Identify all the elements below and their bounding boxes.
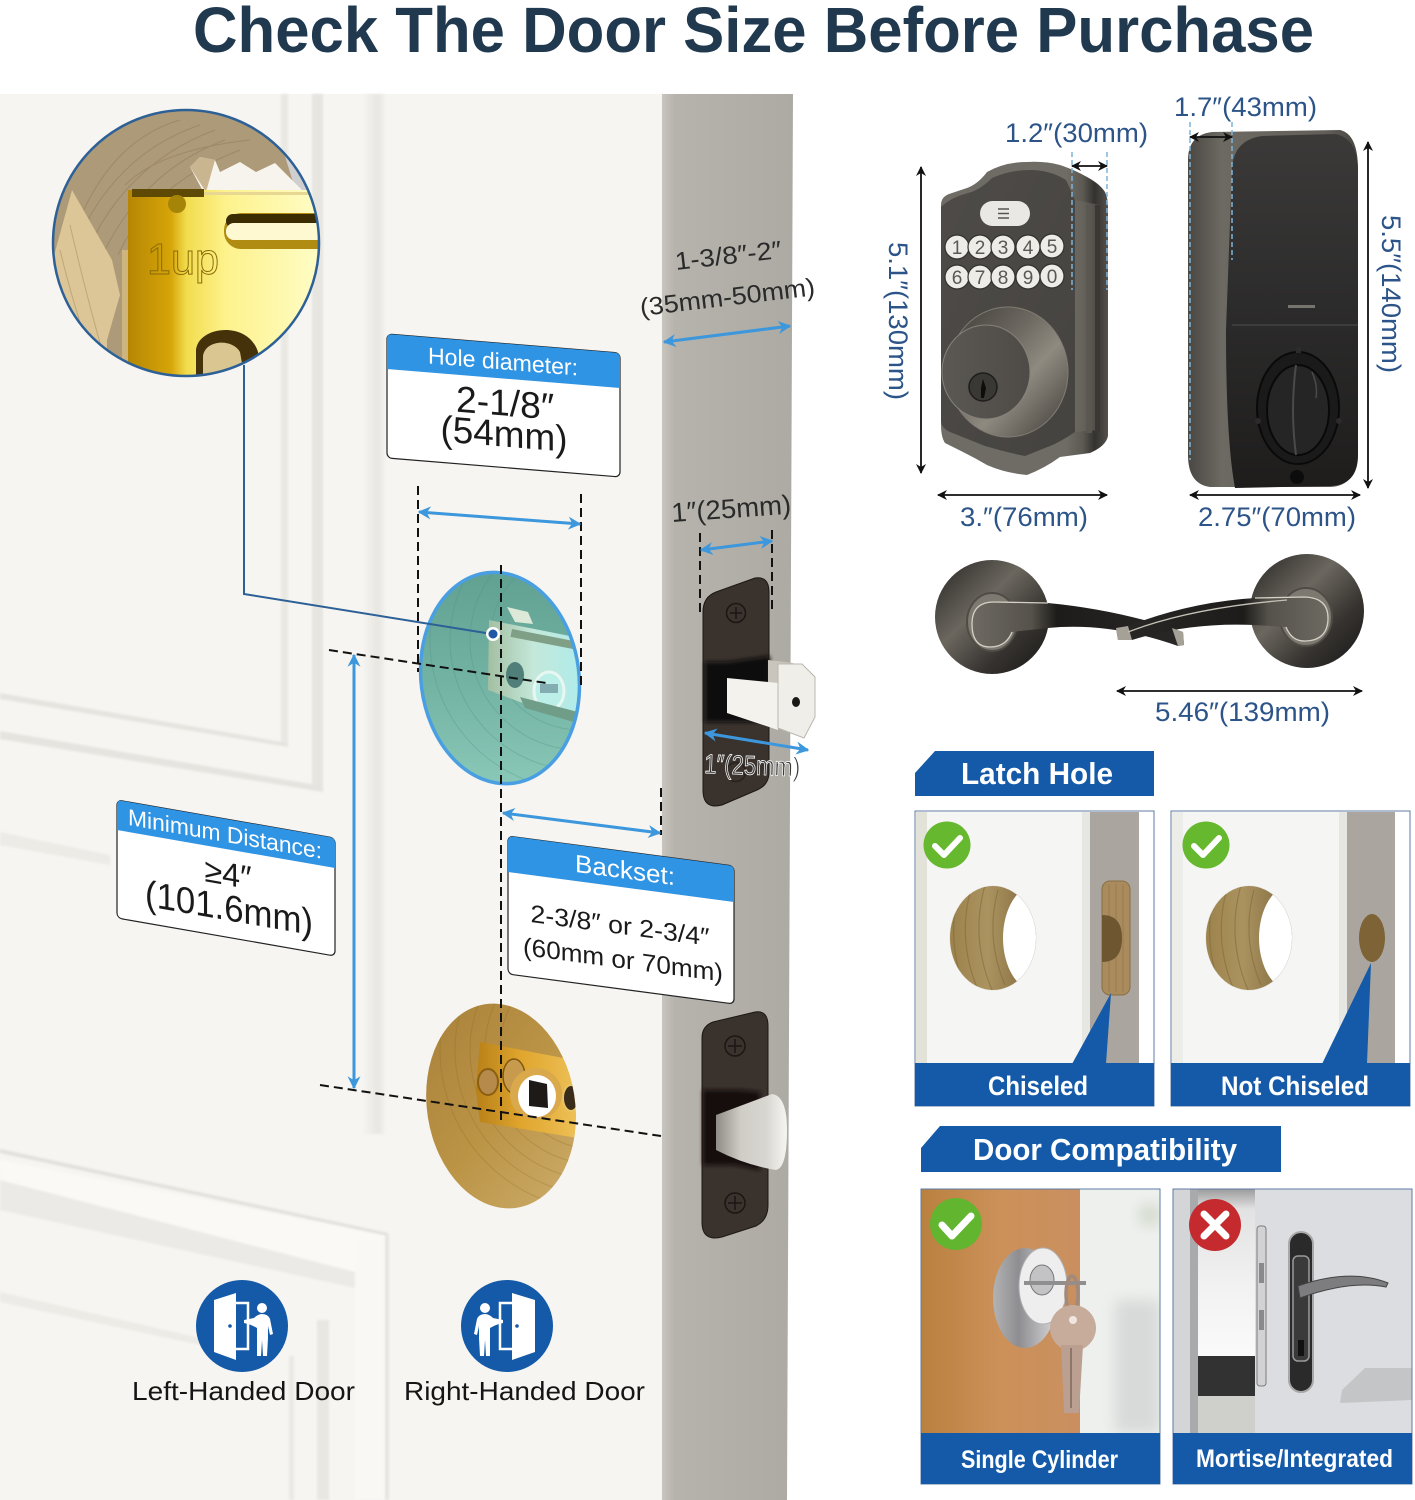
lock dimension labels: 3.″(76mm) — [960, 502, 1088, 532]
leader line to magnifier — [244, 365, 500, 641]
menu button — [980, 201, 1030, 226]
label: door thickness — [638, 236, 816, 322]
panel: mortise integrated: Mortise/Integrated — [1196, 1445, 1393, 1473]
keypad: 5 — [1047, 237, 1057, 258]
callout: backset: Backset: — [575, 850, 675, 891]
door illustration — [0, 94, 793, 1500]
keypad deadbolt, front view — [941, 162, 1108, 475]
panel: single cylinder: Single Cylinder — [961, 1446, 1118, 1474]
keypad: 7 — [975, 268, 985, 289]
callout: hole diameter: Hole diameter: — [428, 342, 578, 381]
callout: minimum distance: ≥4″ — [204, 852, 252, 897]
section heading: door compatibility: Door Compatibility — [973, 1132, 1238, 1167]
strike plate with beveled latch — [702, 1012, 787, 1238]
lock dimension labels: 1.7″(43mm) — [1174, 92, 1317, 122]
strike plate with square deadbolt — [703, 578, 815, 806]
keypad: 2 — [975, 238, 985, 259]
section heading: door compatibility — [921, 1126, 1281, 1172]
screw — [726, 604, 746, 622]
label: bolt width: 1″(25mm) — [704, 749, 801, 782]
icon: check — [930, 1198, 982, 1250]
keypad: 6 — [952, 268, 962, 289]
lever handles — [935, 554, 1364, 674]
panel: chiseled: Chiseled — [988, 1071, 1088, 1101]
section heading: latch hole: Latch Hole — [961, 756, 1113, 791]
magnifier: latch plate close-up — [50, 105, 334, 380]
icon: left-handed door — [196, 1280, 288, 1372]
callout: minimum distance — [117, 800, 335, 956]
lock dimension labels: 5.1″(130mm) — [883, 242, 913, 400]
panel: single cylinder — [921, 1189, 1162, 1484]
smart lock, back view — [1188, 130, 1358, 488]
panel: not chiseled: Not Chiseled — [1221, 1071, 1369, 1101]
callout: hole diameter: (54mm) — [440, 407, 567, 460]
callout: minimum distance: Minimum Distance: — [128, 804, 322, 864]
bore hole — [1206, 886, 1292, 990]
keypad: 8 — [998, 268, 1008, 289]
panel: mortise integrated — [1173, 1189, 1412, 1484]
lock dimension labels: 2.75″(70mm) — [1198, 502, 1356, 532]
keyed cylinder — [942, 307, 1068, 437]
chiseled latch recess — [1102, 881, 1130, 995]
section heading: latch hole — [915, 751, 1154, 796]
callout: backset: 2-3/8″ or 2-3/4″ — [530, 900, 710, 952]
callout: hole diameter — [387, 334, 620, 477]
bore hole — [950, 886, 1036, 990]
icon: check — [924, 822, 970, 868]
lock dimension labels: 1.2″(30mm) — [1005, 118, 1148, 148]
top bore hole, highlighted — [418, 570, 582, 786]
keypad — [945, 234, 1064, 289]
callout: backset — [508, 836, 734, 1004]
1up stamp: 1up — [147, 235, 219, 284]
door dimension arrows — [354, 326, 808, 1088]
keypad: 9 — [1023, 268, 1033, 289]
label: right-handed door: Right-Handed Door — [404, 1376, 645, 1406]
keypad: 0 — [1047, 267, 1057, 288]
keypad: 3 — [998, 238, 1008, 259]
label: left-handed door: Left-Handed Door — [132, 1376, 355, 1406]
panel: chiseled — [915, 811, 1154, 1106]
keypad: 1 — [952, 238, 962, 259]
callout: hole diameter: 2-1/8″ — [456, 378, 554, 428]
lock dimension labels — [883, 92, 1406, 727]
black dimension arrows — [921, 137, 1368, 691]
lock dimension labels: 5.46″(139mm) — [1155, 697, 1330, 727]
icon: cross — [1189, 1199, 1241, 1251]
label: door thickness: (35mm-50mm) — [638, 273, 816, 322]
panel: not chiseled — [1171, 811, 1410, 1106]
label: door thickness: 1-3/8″-2″ — [674, 236, 783, 276]
latch bore — [1359, 914, 1385, 962]
lock dimension labels: 5.5″(140mm) — [1376, 215, 1406, 373]
bottom bore hole, wood with latch plate — [426, 1004, 576, 1208]
callout: backset: (60mm or 70mm) — [523, 933, 723, 988]
keypad: 4 — [1023, 238, 1034, 259]
icon: check — [1182, 822, 1230, 868]
callout: minimum distance: (101.6mm) — [145, 872, 313, 943]
icon: right-handed door — [461, 1280, 553, 1372]
label: faceplate width: 1″(25mm) — [670, 490, 792, 528]
